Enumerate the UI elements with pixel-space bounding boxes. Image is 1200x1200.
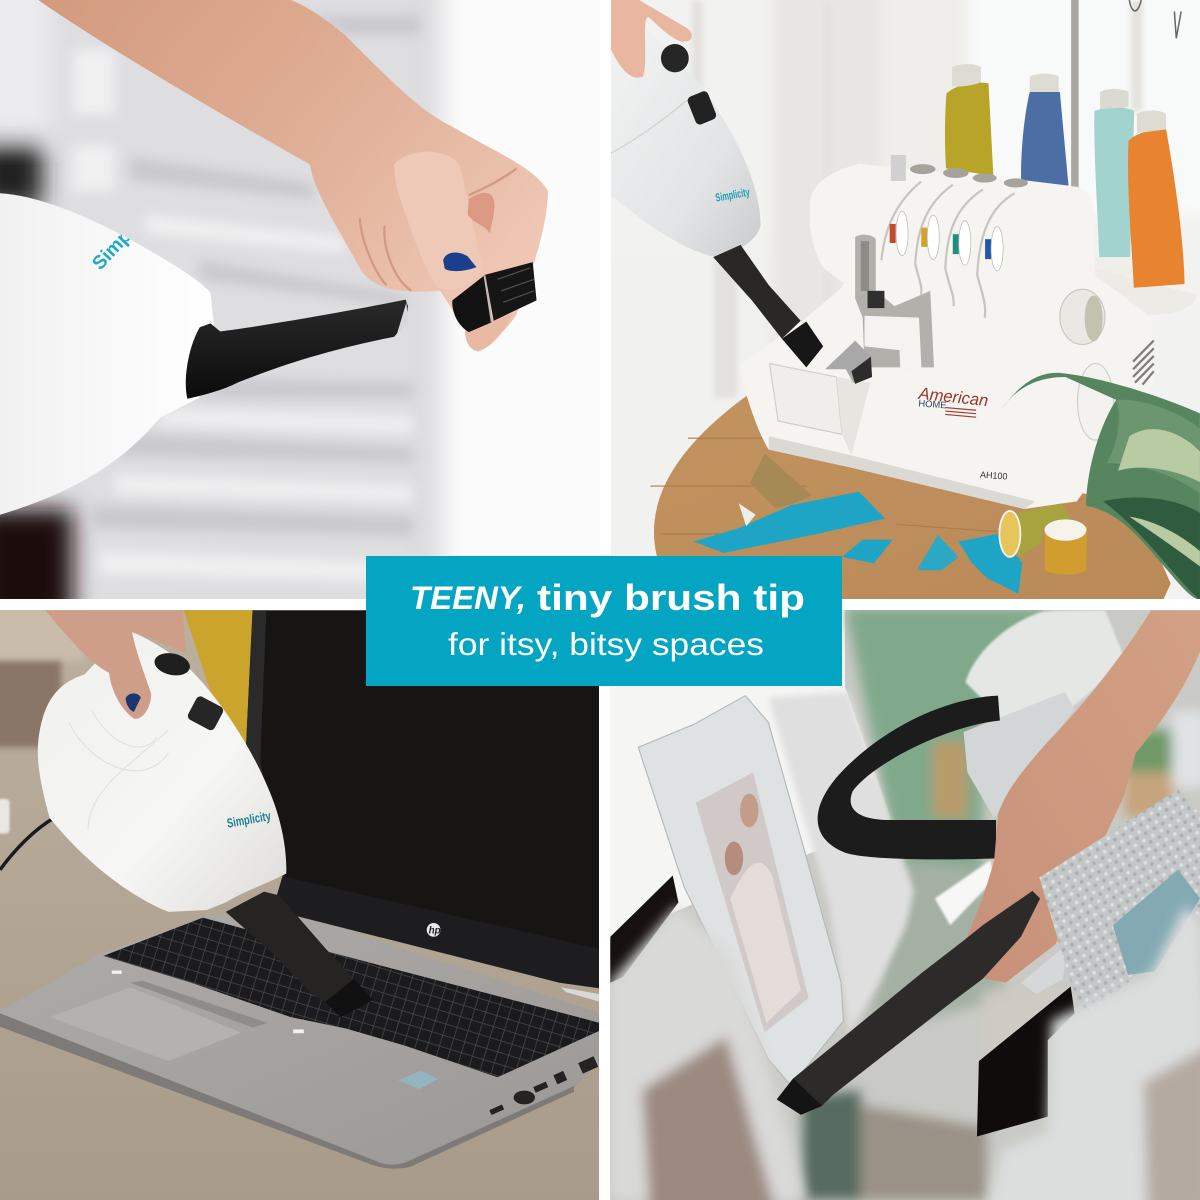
wooden round table [654, 396, 1171, 600]
side handwheel [1060, 289, 1114, 440]
crystal frame right [1039, 789, 1200, 1017]
arm and hand [38, 0, 548, 351]
fabric scraps and thread [694, 453, 1022, 594]
touchpad [50, 981, 268, 1061]
crevice nozzle with brush [777, 891, 1040, 1115]
side cover panel [770, 364, 842, 434]
black stand far left [610, 876, 678, 983]
panel: cleaning crystal picture frames [600, 600, 1200, 1200]
American Home brand mark: American [917, 384, 989, 410]
side ports [489, 1056, 598, 1115]
thumb [394, 152, 483, 290]
American Home brand mark [918, 388, 988, 418]
base front shading [769, 436, 1035, 509]
panel: vacuum cleaning a serger sewing machine [611, 0, 1200, 600]
foreground glass left [610, 906, 807, 1200]
power switch [661, 44, 689, 72]
wood plank lines [650, 438, 1002, 534]
white shutter background [0, 0, 454, 599]
model number: AH100 [980, 470, 1008, 482]
callout banner [366, 556, 842, 686]
concentric body ribs [69, 711, 168, 830]
carpet floor [0, 600, 600, 1200]
keyboard [103, 918, 600, 1077]
hand on vacuum [45, 610, 186, 719]
Simplicity logo: Simplicity [226, 808, 272, 831]
nail [963, 956, 977, 975]
lower screen bezel [275, 876, 600, 988]
crystal frame left with photo [638, 696, 843, 1086]
Simplicity logo: Simplicity [89, 194, 166, 274]
finger shadows [360, 168, 517, 291]
upright front block [864, 316, 922, 368]
thread spools on stand [945, 64, 1197, 315]
hand and forearm [958, 610, 1200, 983]
needle area [855, 235, 934, 367]
table surface [803, 1090, 987, 1200]
blurred beige background, yellow item and cable [0, 608, 253, 870]
laptop screen [246, 610, 600, 987]
metal throat plate [825, 341, 872, 383]
vacuum body [38, 631, 286, 912]
air vent [1133, 341, 1154, 385]
blurred background [600, 600, 1200, 1200]
blue nail polish [443, 252, 476, 271]
back crystal frames [768, 692, 1075, 1032]
dirt release button [186, 695, 225, 732]
blue nail polish [126, 693, 141, 712]
intel sticker [398, 1071, 438, 1089]
banner headline: tiny brush tip: tiny brush tip [537, 577, 805, 618]
tension knobs and spool pin [891, 155, 1028, 188]
tension guide slots [881, 182, 1015, 318]
black nozzle [186, 300, 408, 399]
removable brush tip [452, 262, 537, 332]
dirt release button [688, 91, 716, 124]
fingertip below brush tip [465, 314, 513, 351]
laptop base [0, 876, 600, 1169]
hp logo: hp [429, 926, 441, 937]
hand holding handle [611, 0, 692, 78]
vacuum in background [965, 610, 1124, 719]
white box behind hand [935, 860, 994, 925]
status lights [112, 970, 122, 974]
panel: brush tip cleaning laptop keyboard [0, 600, 600, 1200]
second status light [293, 1029, 304, 1033]
serger sewing machine [739, 155, 1154, 509]
black flexible hose [818, 696, 1000, 859]
nozzle and brush [226, 892, 373, 1017]
leafy plant [1002, 373, 1200, 600]
American Home brand mark: HOME [918, 398, 947, 411]
nozzle with brush tip [713, 245, 823, 367]
Simplicity logo: Simplicity [715, 187, 751, 205]
foreground glass right [987, 906, 1200, 1200]
red fingertip [468, 193, 494, 233]
hp logo [427, 923, 441, 937]
banner subheading: for itsy, bitsy spaces [448, 626, 764, 662]
curtain background [611, 0, 1200, 600]
vacuum body [0, 193, 214, 515]
panel: hand removing brush tip from nozzle [0, 0, 548, 599]
small thread spools on table [999, 503, 1087, 575]
black frame stand [977, 987, 1075, 1137]
power switch [152, 650, 192, 679]
vacuum in hand [611, 0, 761, 256]
banner headline: TEENY: TEENY, [410, 580, 526, 616]
